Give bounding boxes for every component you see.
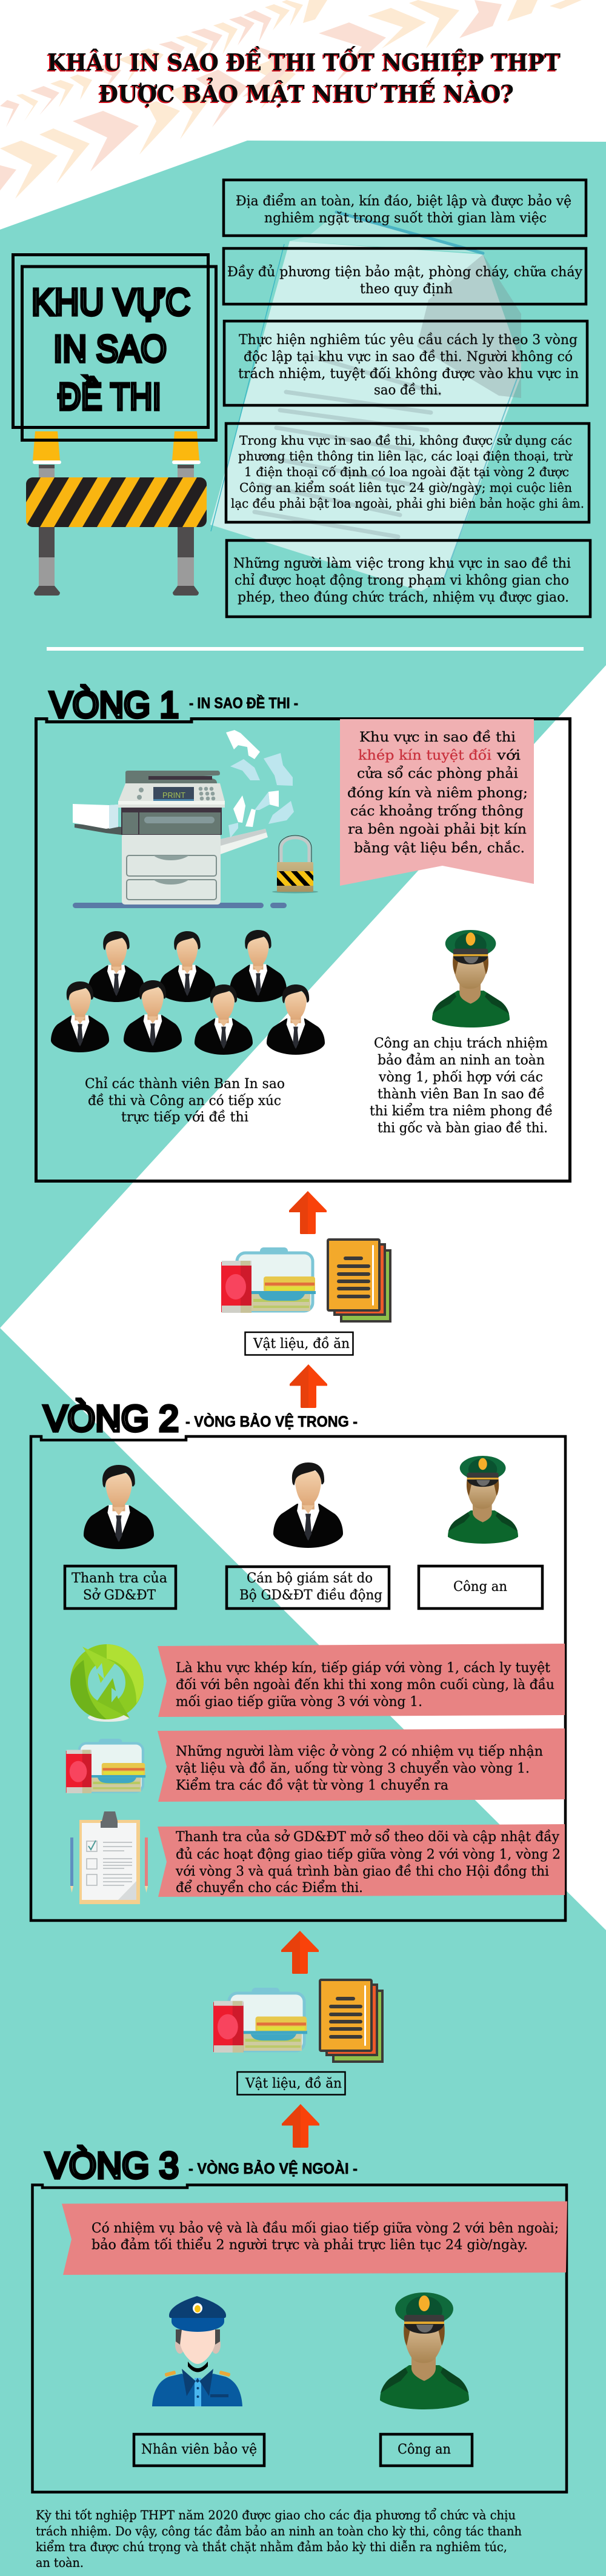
icon: printer: [73, 730, 294, 908]
arrow: [289, 1191, 327, 1234]
text: closing note: trách nhiệm. Do vậy, công tác đảm bảo an ninh an toàn cho kỳ thi, công tác thanh: [36, 2524, 522, 2538]
banner: thanh tra so theo doi: đủ các hoạt động giao tiếp giữa vòng 2 với vòng 1, vòng 2: [176, 1847, 561, 1862]
arrow: [281, 1931, 319, 1974]
label: can bo giam sat: Bộ GD&ĐT điều động: [239, 1587, 382, 1603]
label: nhan vien bao ve: Nhân viên bảo vệ: [141, 2442, 257, 2457]
text box: 3 vong: độc lập tại khu vực in sao đề thi. Người không có: [244, 349, 573, 365]
panel: khu vuc in sao de thi: [13, 254, 216, 440]
heading: vong 1: [50, 685, 298, 725]
icon: food: [213, 1988, 307, 2053]
text box: pham vi: phép, theo đúng chức trách, nhiệm vụ được giao.: [238, 590, 569, 605]
icon: documents: [320, 1980, 382, 2062]
icon: clipboard: [70, 1811, 148, 1904]
callout: khep kin: Khu vực in sao đề thi: [359, 729, 516, 745]
label: thanh tra: Sở GD&ĐT: [83, 1587, 156, 1603]
banner: thanh tra so theo doi: với vòng 3 và quá trình bàn giao đề thi cho Hội đồng thi: [175, 1864, 549, 1879]
callout: khep kin: bằng vật liệu bền, chắc.: [354, 840, 525, 856]
label: can bo giam sat: [227, 1567, 389, 1608]
heading: vong 3: VÒNG 3: [45, 2145, 179, 2186]
text box: dia diem: nghiêm ngặt trong suốt thời gian làm việc: [264, 210, 547, 226]
text: exam board caption: [85, 1076, 285, 1125]
icon: road barrier: [26, 431, 207, 596]
text box: lien lac: lạc đều phải bật loa ngoài, phải ghi biên bản hoặc ghi âm.: [231, 496, 584, 511]
text box: lien lac: Công an kiểm soát liên tục 24 giờ/ngày; mọi cuộc liên: [239, 480, 572, 495]
icon: supervisor: [273, 1462, 343, 1548]
title: ĐƯỢC BẢO MẬT NHƯ THẾ NÀO?: [99, 78, 514, 107]
banner: bao ve: bảo đảm tối thiểu 2 người trực và phải trực liên tục 24 giờ/ngày.: [92, 2236, 528, 2252]
text: closing note: [36, 2508, 522, 2570]
text: police caption: Công an chịu trách nhiệm: [374, 1036, 548, 1051]
panel: khu vuc in sao de thi: IN SAO: [53, 328, 167, 370]
text box: 3 vong: sao đề thi.: [374, 382, 442, 398]
text: closing note: kiểm tra được chú trọng và thắt chặt nhằm đảm bảo kỳ thi diễn ra nghiêm túc,: [36, 2540, 507, 2554]
text: police caption: thành viên Ban In sao đề: [378, 1086, 545, 1102]
text box: lien lac: phương tiện thông tin liên lạc, các loại điện thoại, trừ: [238, 449, 573, 463]
heading: vong 2: [44, 1398, 358, 1439]
icon: documents: [328, 1240, 390, 1321]
banner: nhiem vu tiep nhan: Những người làm việc ở vòng 2 có nhiệm vụ tiếp nhận: [176, 1744, 543, 1759]
banner: bao ve: Có nhiệm vụ bảo vệ và là đầu mối giao tiếp giữa vòng 2 với bên ngoài;: [92, 2220, 559, 2236]
banner: khu vuc khep kin: đối với bên ngoài đến khi thi xong môn cuối cùng, là đầu: [176, 1677, 554, 1693]
text: police caption: thi gốc và bàn giao đề thi.: [378, 1120, 548, 1136]
icon: police officer: [448, 1456, 518, 1544]
label: vat lieu do an: [245, 1332, 353, 1355]
text box: 3 vong: trách nhiệm, tuyệt đối không được vào khu vực in: [238, 366, 579, 382]
arrow: [290, 1364, 327, 1408]
icon: security guard: [152, 2296, 242, 2406]
text box: phuong tien: [224, 248, 586, 304]
title: [47, 46, 561, 107]
icon: food: [221, 1247, 316, 1313]
text box: 3 vong: [224, 321, 587, 405]
label: nhan vien bao ve: [134, 2434, 264, 2466]
banner: khu vuc khep kin: Là khu vực khép kín, tiếp giáp với vòng 1, cách ly tuyệt: [176, 1660, 550, 1676]
text: exam board caption: trực tiếp với đề thi: [121, 1109, 248, 1125]
icon: exam board group: [51, 930, 325, 1055]
text: exam board caption: Chỉ các thành viên Ban In sao: [85, 1076, 285, 1092]
icon: food small: [66, 1739, 145, 1793]
callout: khep kin: đóng kín và niêm phong;: [347, 786, 528, 801]
icon: padlock: [272, 835, 318, 893]
heading: vong 2: VÒNG 2: [44, 1398, 179, 1439]
text box: phuong tien: Đầy đủ phương tiện bảo mật, phòng cháy, chữa cháy: [227, 264, 583, 280]
panel: khu vuc in sao de thi: KHU VỰC: [32, 282, 190, 324]
icon: inspector: [84, 1465, 154, 1549]
text: exam board caption: đề thi và Công an có tiếp xúc: [88, 1093, 281, 1109]
label: cong an: [419, 1566, 542, 1608]
banner: nhiem vu tiep nhan: [158, 1728, 565, 1802]
heading: vong 3: [45, 2145, 358, 2186]
text box: dia diem: [224, 180, 586, 236]
callout: khep kin: cửa sổ các phòng phải: [357, 765, 518, 782]
callout: khep kin: [340, 719, 534, 886]
banner: khu vuc khep kin: mối giao tiếp giữa vòng 3 với vòng 1.: [176, 1694, 422, 1710]
label: can bo giam sat: Cán bộ giám sát do: [247, 1571, 373, 1586]
panel: vong 3 frame: [33, 2185, 567, 2492]
panel: vong 2 frame: [31, 1436, 565, 1920]
text box: pham vi: [227, 540, 590, 617]
text: closing note: Kỳ thi tốt nghiệp THPT năm 2020 được giao cho các địa phương tổ chức và chịu: [36, 2508, 516, 2523]
banner: bao ve: [62, 2202, 567, 2275]
title: KHÂU IN SAO ĐỀ THI TỐT NGHIỆP THPT: [47, 46, 561, 76]
banner: nhiem vu tiep nhan: vật liệu và đồ ăn, uống từ vòng 3 chuyển vào vòng 1.: [175, 1759, 530, 1776]
banner: khu vuc khep kin: [158, 1644, 565, 1717]
label: thanh tra: Thanh tra của: [72, 1570, 167, 1586]
callout: khep kin: các khoảng trống thông: [350, 803, 524, 819]
label: cong an: Công an: [453, 1579, 507, 1595]
panel: vong 1 frame: [36, 719, 570, 1181]
divider: [47, 647, 584, 651]
heading: vong 2: - VÒNG BẢO VỆ TRONG -: [185, 1412, 358, 1430]
callout: khep kin: ra bên ngoài phải bịt kín: [348, 822, 527, 837]
label: cong an: Công an: [398, 2442, 451, 2457]
icon: police officer: [380, 2292, 469, 2409]
text box: lien lac: Trong khu vực in sao đề thi, không được sử dụng các: [239, 433, 572, 448]
label: vat lieu do an: [238, 2072, 345, 2095]
text box: pham vi: Những người làm việc trong khu vực in sao đề thi: [233, 556, 571, 571]
text box: pham vi: chỉ được hoạt động trong phạm vi không gian cho: [235, 573, 569, 588]
heading: vong 3: - VÒNG BẢO VỆ NGOÀI -: [188, 2159, 358, 2177]
heading: vong 1: VÒNG 1: [50, 685, 179, 725]
text box: dia diem: Địa điểm an toàn, kín đáo, biệt lập và được bảo vệ: [236, 192, 571, 209]
label: vat lieu do an: Vật liệu, đồ ăn: [253, 1336, 350, 1352]
text box: phuong tien: theo quy định: [360, 282, 453, 297]
text box: lien lac: [226, 423, 589, 522]
text box: lien lac: 1 điện thoại cố định có loa ngoài đặt tại vòng 2 được: [244, 465, 569, 479]
arrow: [282, 2104, 319, 2148]
text: police caption: thi kiểm tra niêm phong đề: [370, 1102, 553, 1119]
icon: police officer: [432, 930, 510, 1027]
banner: thanh tra so theo doi: Thanh tra của sở GD&ĐT mở sổ theo dõi và cập nhật đầy: [176, 1828, 560, 1845]
label: cong an: [381, 2434, 472, 2466]
banner: thanh tra so theo doi: [158, 1824, 565, 1897]
icon: recycle: [70, 1644, 144, 1722]
heading: vong 1: - IN SAO ĐỀ THI -: [189, 694, 298, 712]
text: police caption: vòng 1, phối hợp với các: [378, 1069, 543, 1085]
text: police caption: bảo đảm an ninh an toàn: [378, 1052, 545, 1068]
watermark: document page: [210, 212, 521, 591]
panel: khu vuc in sao de thi: ĐỀ THI: [58, 376, 161, 418]
text box: 3 vong: Thực hiện nghiêm túc yêu cầu cách ly theo 3 vòng: [239, 332, 578, 348]
label: thanh tra: [65, 1566, 176, 1608]
label: vat lieu do an: Vật liệu, đồ ăn: [245, 2076, 342, 2091]
text: closing note: an toàn.: [36, 2555, 84, 2570]
chevron pattern: [0, 0, 582, 206]
text: police caption: [370, 1036, 553, 1136]
banner: thanh tra so theo doi: để chuyển cho các Điểm thi.: [176, 1879, 363, 1896]
callout: khep kin: với: [496, 748, 521, 763]
icon: printer: PRINT: [162, 791, 185, 800]
banner: nhiem vu tiep nhan: Kiểm tra các đồ vật từ vòng 1 chuyển ra: [176, 1776, 448, 1793]
callout: khep kin: khép kín tuyệt đối: [358, 748, 491, 763]
